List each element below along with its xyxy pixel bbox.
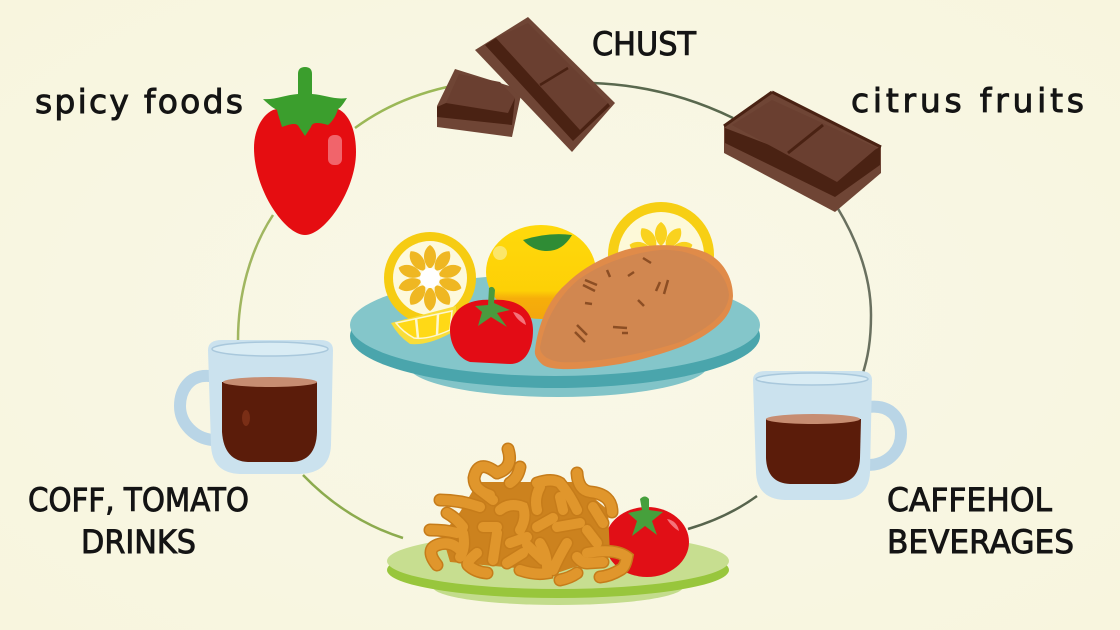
pasta pile: [430, 449, 627, 580]
bread: [535, 245, 733, 369]
tomato: [605, 496, 689, 577]
large chocolate piece: [475, 17, 615, 152]
label: crust: CHUST: [592, 25, 696, 63]
lemon slice left: [384, 232, 476, 344]
plate: [387, 533, 729, 605]
icon: strawberry: [254, 67, 356, 235]
small chocolate piece: [437, 69, 522, 137]
label: caffeine beverages: BEVERAGES: [887, 523, 1074, 561]
icon: chocolate bar right: [724, 92, 881, 212]
plate: [350, 274, 760, 397]
label: coffee tomato drinks: DRINKS: [81, 523, 196, 561]
label: spicy foods: spicy foods: [35, 82, 243, 121]
icon: glass mug left: [180, 340, 333, 474]
lemon slice back right: [608, 202, 714, 308]
cycle ring: [238, 83, 871, 538]
yellow citrus: [486, 225, 596, 319]
label: caffeine beverages: CAFFEHOL: [887, 481, 1052, 519]
label: citrus fruits: citrus fruits: [851, 81, 1084, 120]
bottom plate with pasta: [387, 449, 729, 605]
tomato: [450, 287, 533, 364]
icon: glass mug right: [753, 371, 901, 500]
label: caffeine beverages: [887, 481, 1074, 561]
central plate with fruit: [350, 202, 760, 397]
icon: chocolate pieces top: [437, 17, 615, 152]
label: coffee tomato drinks: COFF, TOMATO: [28, 481, 249, 519]
label: coffee tomato drinks: [28, 481, 249, 561]
